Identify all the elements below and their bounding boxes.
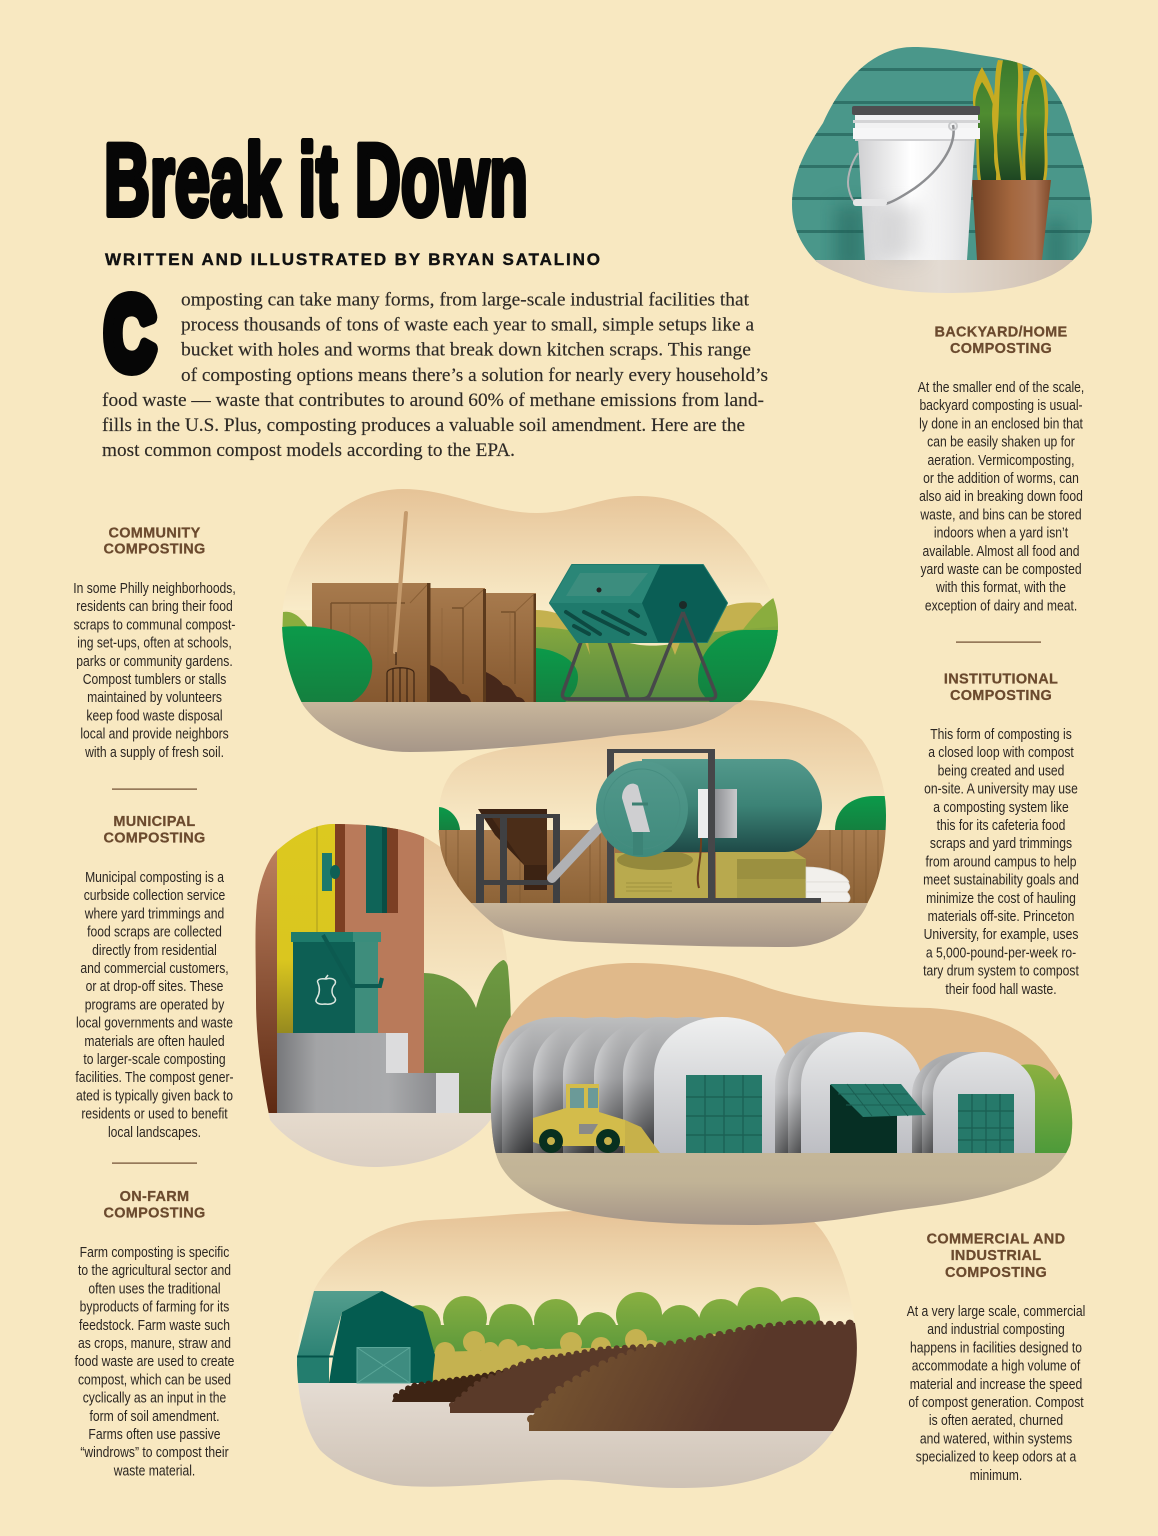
distant hills [282, 597, 790, 702]
text: community: with a supply of fresh soil. [84, 744, 224, 760]
text: institutional: scraps and yard trimmings [930, 835, 1072, 851]
text: on-farm: compost, which can be used [78, 1371, 231, 1388]
text: on-farm: food waste are used to create [75, 1353, 234, 1369]
left wall strip [256, 850, 277, 1113]
open door and awning [830, 1084, 926, 1153]
panel: backyard illustration [792, 47, 1092, 293]
municipal ground [268, 1113, 491, 1167]
text: municipal: curbside collection service [84, 887, 225, 903]
heading: backyard [934, 324, 1068, 357]
heading: backyard: COMPOSTING [950, 341, 1052, 357]
green bin [291, 932, 382, 1033]
text: on-farm: form of soil amendment. [89, 1408, 220, 1424]
text: backyard [918, 379, 1084, 614]
text: municipal: facilities. The compost gener- [75, 1069, 234, 1085]
text: backyard: indoors when a yard isn’t [934, 524, 1068, 541]
text: backyard: with this format, with the [935, 579, 1066, 595]
text: backyard: backyard composting is usual- [919, 397, 1083, 413]
text: commercial: material and increase the speed [910, 1376, 1082, 1392]
text: institutional: meet sustainability goals and [923, 871, 1079, 888]
panel: commercial illustration [485, 955, 1085, 1228]
text: community [73, 580, 236, 760]
title: Break it Down [104, 123, 528, 237]
text: on-farm: Farm composting is specific [80, 1244, 229, 1260]
heading: backyard: BACKYARD/HOME [934, 324, 1068, 340]
institutional ground [471, 903, 868, 947]
text: municipal: directly from residential [92, 942, 217, 958]
pot [972, 180, 1051, 260]
text: on-farm [75, 1244, 234, 1479]
shelf [816, 260, 1073, 293]
text: backyard: also aid in breaking down food [919, 488, 1083, 504]
intro paragraph: most common compost models according to the EPA. [102, 440, 515, 461]
frame front [607, 749, 821, 903]
text: municipal: local landscapes. [108, 1124, 201, 1140]
text: commercial: accommodate a high volume of [912, 1357, 1080, 1374]
text: municipal [75, 869, 234, 1140]
door large [686, 1075, 762, 1153]
text: community: local and provide neighbors [80, 725, 229, 742]
panel: municipal illustration [250, 820, 520, 1173]
bushes [282, 626, 790, 702]
text: backyard: exception of dairy and meat. [925, 597, 1077, 614]
text: on-farm: byproducts of farming for its [80, 1298, 229, 1315]
text: commercial: and watered, within systems [920, 1430, 1072, 1447]
tumbler [550, 565, 727, 642]
text: institutional [923, 726, 1079, 997]
text: municipal: residents or used to benefit [81, 1105, 228, 1122]
text: backyard: ly done in an enclosed bin that [919, 415, 1083, 432]
text: backyard: aeration. Vermicomposting, [928, 452, 1074, 468]
brick wall [345, 824, 424, 1073]
text: on-farm: cyclically as an input in the [83, 1389, 226, 1406]
heading: on-farm: COMPOSTING [103, 1206, 206, 1222]
farm sky [316, 1211, 847, 1288]
text: municipal: local governments and waste [76, 1014, 233, 1031]
heading: on-farm: ON-FARM [120, 1189, 189, 1205]
text: backyard: can be easily shaken up for [927, 433, 1075, 450]
heading: community: COMPOSTING [103, 542, 206, 558]
heading: commercial: COMMERCIAL AND [927, 1232, 1065, 1248]
text: municipal: and commercial customers, [80, 960, 229, 976]
hopper [478, 809, 547, 890]
community sky [275, 485, 785, 610]
text: institutional: this for its cafeteria food [937, 817, 1065, 833]
panel: farm illustration [290, 1200, 870, 1493]
text: community: scraps to communal compost- [74, 616, 235, 633]
stand [476, 814, 560, 903]
text: institutional: a composting system like [933, 799, 1069, 815]
intro paragraph: food waste — waste that contributes to around 60% of methane emissions from land- [102, 390, 764, 411]
drop cap: C [105, 278, 155, 390]
heading: municipal: MUNICIPAL [113, 814, 196, 830]
text: community: keep food waste disposal [86, 707, 223, 724]
text: institutional: their food hall waste. [945, 981, 1057, 997]
farm ground [298, 1383, 833, 1488]
text: community: Compost tumblers or stalls [83, 671, 226, 687]
text: community: residents can bring their food [76, 598, 233, 614]
heading: community [103, 526, 206, 558]
wall with siding [780, 40, 1100, 280]
heading: commercial: COMPOSTING [945, 1265, 1047, 1281]
yellow door [277, 820, 345, 1033]
heading: institutional: INSTITUTIONAL [944, 672, 1058, 688]
text: municipal: ated is typically given back to [76, 1087, 233, 1104]
back compost row [392, 1347, 646, 1402]
commercial ground [485, 1153, 1085, 1228]
heading: community: COMMUNITY [108, 526, 201, 542]
plant [973, 60, 1048, 180]
text: institutional: on-site. A university may use [924, 780, 1078, 797]
text: on-farm: often uses the traditional [88, 1280, 221, 1297]
text: municipal: to larger-scale composting [83, 1051, 226, 1067]
text: institutional: a closed loop with compost [928, 744, 1074, 760]
intro paragraph [102, 290, 768, 461]
heading: municipal: COMPOSTING [103, 830, 206, 846]
text: commercial: and industrial composting [927, 1321, 1065, 1337]
commercial sky [485, 955, 1085, 1155]
text: municipal: where yard trimmings and [84, 905, 224, 922]
text: community: ing set-ups, often at schools, [77, 634, 232, 651]
control panel [698, 789, 737, 838]
heading: institutional [944, 672, 1058, 704]
large quonset [491, 1017, 789, 1153]
text: backyard: At the smaller end of the scale, [918, 379, 1084, 395]
door right [958, 1094, 1014, 1153]
barn [297, 1291, 435, 1383]
text: institutional: being created and used [938, 762, 1064, 779]
text: commercial: minimum. [970, 1467, 1022, 1483]
middle quonset [775, 1032, 922, 1153]
text: backyard: available. Almost all food and [922, 543, 1080, 559]
right quonset [912, 1052, 1035, 1153]
text: backyard: waste, and bins can be stored [920, 506, 1082, 523]
pitchfork [387, 513, 414, 702]
text: community: maintained by volunteers [87, 689, 222, 705]
heading: commercial: INDUSTRIAL [951, 1248, 1041, 1264]
heading: commercial [927, 1232, 1065, 1281]
heading: municipal [103, 814, 206, 846]
text: municipal: materials are often hauled [84, 1033, 225, 1049]
window [366, 820, 398, 913]
text: institutional: minimize the cost of hauling [926, 890, 1076, 906]
text: institutional: University, for example, uses [924, 926, 1079, 942]
text: institutional: materials off-site. Princeton [928, 908, 1074, 924]
heading: institutional: COMPOSTING [950, 688, 1052, 704]
intro paragraph: fills in the U.S. Plus, composting produces a valuable soil amendment. Here are the [102, 415, 745, 436]
loader [533, 1084, 660, 1153]
bags [806, 867, 850, 902]
icon: apple core [316, 975, 335, 1004]
compost piles [430, 665, 525, 702]
text: on-farm: as crops, manure, straw and [78, 1335, 231, 1351]
byline: WRITTEN AND ILLUSTRATED BY BRYAN SATALINO [105, 250, 600, 269]
text: institutional: tary drum system to compost [923, 962, 1079, 979]
text: municipal: food scraps are collected [87, 923, 222, 940]
middle compost row [450, 1347, 637, 1413]
text: institutional: This form of composting is [930, 726, 1072, 742]
tree line [399, 1287, 820, 1385]
auger [547, 822, 602, 883]
text: commercial: At a very large scale, commercial [907, 1303, 1085, 1319]
intro paragraph: bucket with holes and worms that break down kitchen scraps. This range [181, 340, 751, 361]
panel: community illustration [275, 485, 790, 757]
text: backyard: or the addition of worms, can [923, 470, 1079, 486]
institutional sky [442, 700, 884, 796]
text: institutional: a 5,000-pound-per-week ro- [926, 944, 1076, 961]
text: on-farm: Farms often use passive [88, 1426, 221, 1442]
intro paragraph: of composting options means there’s a solution for nearly every household’s [181, 365, 768, 386]
bucket [848, 106, 980, 260]
text: municipal: programs are operated by [85, 996, 224, 1013]
text: institutional: from around campus to help [925, 853, 1077, 870]
text: community: In some Philly neighborhoods, [73, 580, 236, 596]
intro paragraph: process thousands of tons of waste each year to small, simple setups like a [181, 315, 755, 336]
text: municipal: Municipal composting is a [85, 869, 224, 885]
text: commercial: is often aerated, churned [929, 1412, 1063, 1428]
rotary drum [596, 759, 822, 857]
panel: institutional illustration [438, 700, 886, 947]
front compost row [529, 1322, 860, 1431]
text: on-farm: feedstock. Farm waste such [79, 1317, 230, 1333]
commercial bush [1021, 1064, 1080, 1153]
tumbler stand rear [562, 642, 628, 699]
tumbler stand front [568, 612, 716, 699]
wire [698, 838, 701, 888]
text: backyard: yard waste can be composted [920, 561, 1082, 577]
text: commercial: specialized to keep odors at a [916, 1448, 1077, 1465]
text: on-farm: waste material. [113, 1462, 195, 1479]
yellow shrubs [433, 1329, 722, 1385]
frame rear [607, 749, 614, 903]
text: commercial: of compost generation. Compost [908, 1394, 1084, 1410]
heading: on-farm [103, 1189, 206, 1222]
text: municipal: or at drop-off sites. These [86, 978, 223, 994]
bins [312, 583, 536, 702]
steps [277, 1033, 459, 1113]
text: on-farm: “windrows” to compost their [80, 1444, 229, 1460]
fence [430, 830, 900, 903]
community ground [275, 702, 785, 757]
municipal sky [274, 824, 506, 956]
text: commercial: happens in facilities designed to [910, 1339, 1082, 1356]
text: on-farm: to the agricultural sector and [78, 1262, 231, 1278]
text: community: parks or community gardens. [76, 653, 233, 669]
olive boxes [615, 851, 806, 898]
institutional bushes [439, 796, 890, 830]
municipal bush [424, 960, 515, 1113]
text: commercial [907, 1303, 1085, 1483]
intro paragraph: omposting can take many forms, from large-scale industrial facilities that [181, 290, 750, 310]
